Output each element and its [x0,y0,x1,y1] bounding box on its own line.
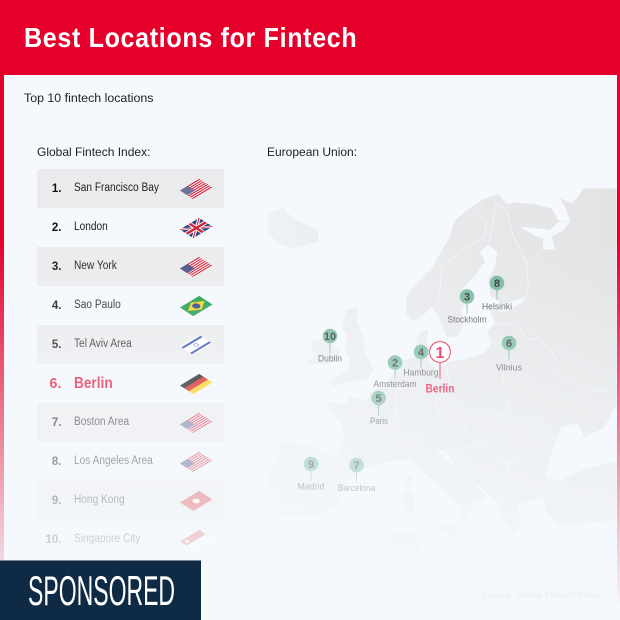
pin 10: Dublin [318,329,342,364]
pin 6: Vilnius: Vilnius [496,362,522,374]
pin 5: Paris: 5 [376,393,382,405]
row 6: Berlin (highlighted): Berlin [74,375,113,392]
row 10: Singapore City [46,530,206,546]
pin 10: Dublin: Dublin [318,354,342,364]
row 3: New York: New York [74,260,117,272]
pin 9: Madrid [298,457,324,492]
pin 8: Helsinki: Helsinki [482,302,512,312]
pin 2: Amsterdam: 2 [392,358,398,370]
row 5: Tel Aviv Area: Tel Aviv Area [74,338,132,350]
row 4: Sao Paulo [52,296,212,316]
pin 6: Vilnius: 6 [506,338,512,350]
pin 8: Helsinki [482,276,512,312]
row 8: Los Angeles Area: Los Angeles Area [74,455,153,467]
row 6: Berlin (highlighted) [49,374,212,394]
row 1: San Francisco Bay [37,169,224,208]
pin 9: Madrid: Madrid [298,482,324,492]
row 4: Sao Paulo: 4. [52,300,62,312]
subtitle: Top 10 fintech locations [24,91,154,105]
pin 8: Helsinki: 8 [494,278,500,290]
row 2: London [52,218,213,238]
pin 5: Paris: Paris [370,416,388,427]
left red edge [0,75,4,620]
row 9: Hong Kong: 9. [52,495,62,507]
row 2: London: 2. [52,222,62,234]
sponsored text: SPONSORED [28,566,175,614]
right red edge [617,75,620,620]
header band [0,0,620,75]
map: Europe with city pins [268,188,616,492]
row 1: San Francisco Bay: 1. [52,183,62,195]
pin 3: Stockholm: Stockholm [448,314,487,326]
pin 3: Stockholm [448,289,487,326]
row 9: Hong Kong [37,481,224,520]
pin 4: Hamburg: Hamburg [404,368,438,378]
pin 5: Paris [370,391,388,427]
pin 2: Amsterdam [374,355,417,390]
land masses [268,188,616,492]
ranking list [37,169,224,546]
pin 2: Amsterdam: Amsterdam [374,379,417,390]
pin 7: Barcelona: 7 [353,460,360,472]
row 1: San Francisco Bay: San Francisco Bay [74,182,159,194]
row 7: Boston Area [37,403,224,442]
row 9: Hong Kong: Hong Kong [74,494,125,506]
row 5: Tel Aviv Area: 5. [52,339,62,351]
pin 7: Barcelona: Barcelona [338,483,376,494]
row 3: New York: 3. [52,261,62,273]
source: Source: Global Fintech Index [482,590,600,600]
pin 3: Stockholm: 3 [464,292,470,304]
pin 9: Madrid: 9 [308,459,314,471]
row 8: Los Angeles Area: 8. [52,456,62,468]
pin 1: Berlin (highlighted): Berlin [426,384,454,396]
inland seas [520,222,617,482]
row 6: Berlin (highlighted): 6. [49,376,62,392]
pin 10: Dublin: 10 [324,331,336,343]
row 10: Singapore City: 10. [46,534,62,546]
pin 4: Hamburg [404,345,438,378]
row 3: New York [37,247,224,286]
row 10: Singapore City: Singapore City [74,533,140,545]
row 5: Tel Aviv Area [37,325,224,364]
row 2: London: London [74,221,108,233]
pin 1: Berlin (highlighted) [426,342,454,396]
heading: Global Fintech Index: Global Fintech Index: [37,145,150,159]
pin 1: Berlin (highlighted): 1 [436,345,445,362]
heading: European Union: European Union: [267,145,357,159]
pin 6: Vilnius [496,336,522,374]
row 8: Los Angeles Area [52,452,212,472]
sponsored badge [0,560,201,620]
pin 4: Hamburg: 4 [418,347,425,359]
row 7: Boston Area: Boston Area [74,416,129,428]
row 7: Boston Area: 7. [52,417,62,429]
title: Best Locations for Fintech [24,22,357,53]
pin 7: Barcelona [338,458,376,494]
row 4: Sao Paulo: Sao Paulo [74,299,121,311]
